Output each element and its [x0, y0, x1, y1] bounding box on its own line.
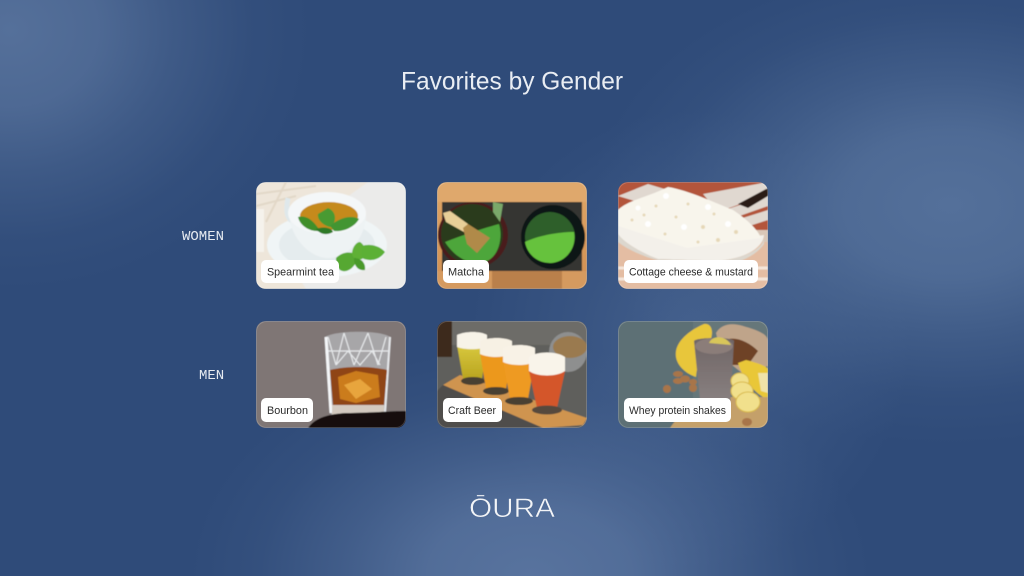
label: bourbon: Bourbon: [267, 405, 308, 417]
label: cottage cheese and mustard: [624, 260, 758, 283]
label: cottage cheese and mustard: Cottage cheese & mustard: [629, 266, 753, 278]
logo: oura: ŌURA: [469, 493, 555, 523]
label: craft beer: Craft Beer: [448, 405, 496, 417]
label: matcha: [443, 260, 489, 283]
card: bourbon: [256, 321, 406, 428]
card: craft beer: [437, 321, 587, 428]
card: whey protein shakes: [618, 321, 768, 428]
label: bourbon: [261, 398, 313, 422]
row label: women: WOMEN: [182, 229, 224, 245]
row label: men: MEN: [199, 368, 224, 384]
label: whey protein shakes: [624, 398, 731, 422]
card: spearmint tea: [256, 182, 406, 289]
label: craft beer: [443, 398, 502, 422]
label: matcha: Matcha: [448, 266, 485, 278]
label: spearmint tea: Spearmint tea: [267, 266, 335, 278]
card: matcha: [437, 182, 587, 289]
title: Favorites by Gender: [401, 68, 623, 96]
label: spearmint tea: [261, 260, 339, 283]
label: whey protein shakes: Whey protein shakes: [629, 405, 726, 417]
card: cottage cheese and mustard: [618, 182, 768, 289]
